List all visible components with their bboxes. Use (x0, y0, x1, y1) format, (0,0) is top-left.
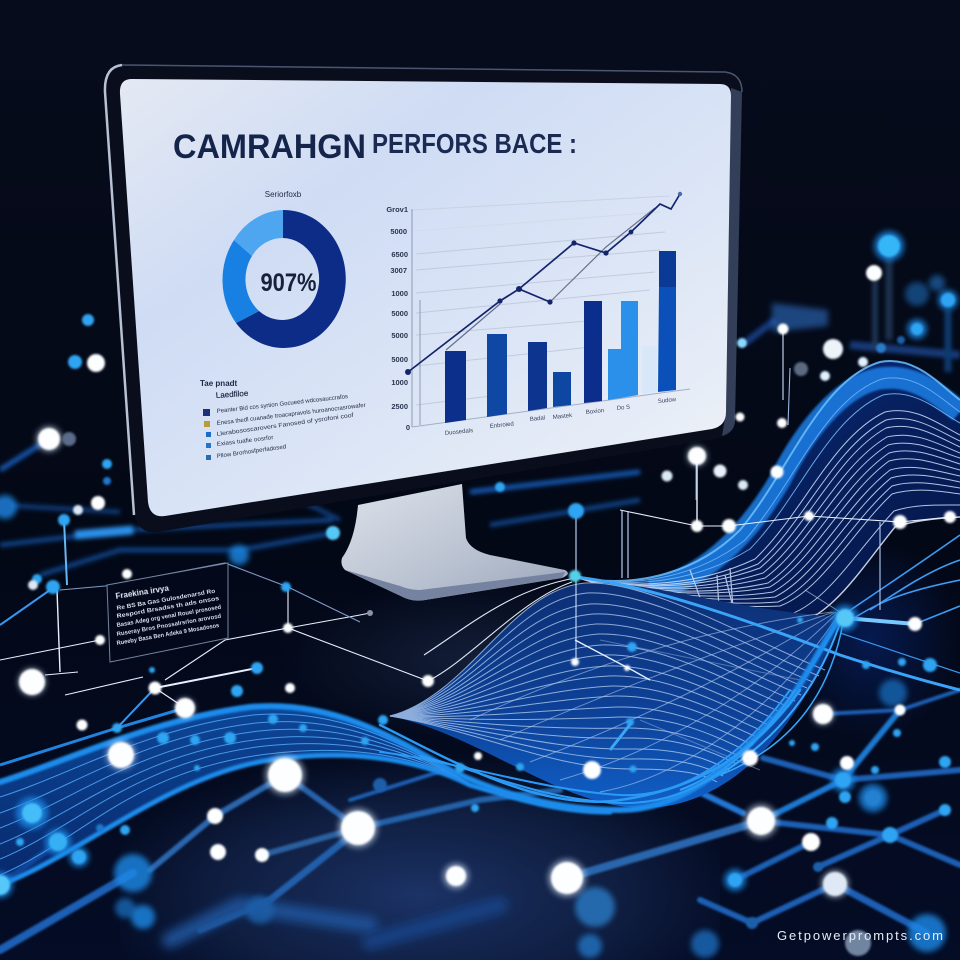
floating data card (107, 563, 228, 662)
blue glow nodes (0, 231, 958, 958)
monitor stand (341, 484, 568, 601)
chart category labels: Mastek (553, 413, 573, 421)
thick network connections (soft blue) (0, 690, 960, 950)
lower band inner lines (0, 714, 468, 875)
donut segment: mid blue (223, 240, 259, 323)
legend rows: Exiass tuafie oosrfor (217, 435, 274, 448)
dashboard title (173, 128, 577, 166)
chart y axis labels: Grov1 (386, 205, 408, 214)
chart category labels: Enbroied (490, 422, 514, 430)
card body text: Re BS Ba Gas Gulosdenarsd Ro (116, 589, 216, 612)
donut caption: Seriorfoxb (265, 190, 302, 199)
donut segment: navy (236, 210, 346, 348)
chart category labels (445, 397, 677, 437)
legend rows (216, 394, 366, 460)
hollow node marker (367, 610, 373, 616)
trend line primary (405, 192, 682, 375)
lower band bright edges (0, 617, 840, 885)
legend (200, 379, 366, 460)
donut segment: light blue (234, 210, 283, 256)
legend rows: Enesa thedl cuanade troacapravols huroanocrasrowafer (217, 403, 366, 427)
fan bright rising lines (610, 617, 844, 790)
chart y axis labels: 5000 (391, 309, 408, 318)
legend rows: Peanter Bid cos syrtion Gocueed wdcosauccrafos (217, 394, 348, 415)
card heading: Fraekina irvya (115, 584, 170, 601)
wave ridge lines (575, 361, 960, 640)
legend heading: Tae pnadt (200, 379, 238, 388)
legend heading (200, 379, 249, 400)
chart y axis labels: 1000 (391, 289, 408, 298)
dashboard title: CAMRAHGN (173, 128, 366, 166)
chart y axis labels: 5000 (390, 227, 407, 236)
right side curves (840, 535, 960, 624)
donut value: 907% (260, 269, 316, 297)
wave bright edge (650, 378, 960, 590)
chart y axis labels: 5000 (391, 331, 408, 340)
trend line secondary (446, 208, 655, 350)
card body text: Basas Adeg org venal Rouel prososed (116, 605, 222, 629)
chart y axis labels: 0 (406, 423, 410, 432)
legend rows: Pllow Brorhosfperfadosed (216, 444, 287, 460)
card body text (116, 589, 222, 647)
donut chart (223, 190, 346, 348)
loose white curves left of fan (424, 578, 575, 681)
bar and line chart (386, 192, 690, 437)
chart grid (412, 196, 690, 427)
chart category labels: Duosedals (445, 428, 473, 437)
chart y axis labels (386, 205, 410, 432)
chart bars (445, 251, 676, 423)
chart y axis labels: 6500 (391, 250, 408, 259)
chart category labels: Sudow (658, 397, 677, 405)
chart y axis labels: 2500 (391, 402, 408, 411)
left blue strand (0, 708, 185, 765)
legend heading: Laedfiloe (216, 389, 249, 400)
chart category labels: Boxion (586, 408, 604, 416)
watermark: Getpowerprompts.com (777, 928, 943, 943)
monitor screen (120, 79, 731, 516)
ridge crossing line (575, 577, 960, 690)
monitor frame (105, 65, 742, 532)
wave surface: saddle fan (390, 535, 960, 808)
legend swatches (203, 409, 211, 460)
wave surface: lower band (0, 617, 840, 885)
network connections: white (0, 330, 950, 708)
chart category labels: Do S (617, 405, 630, 412)
blurred background network (0, 250, 960, 575)
card body text: Rueeby Basa Ben Adeka 9 Mosadosos (116, 623, 220, 647)
chart y axis labels: 5000 (391, 355, 408, 364)
chart y axis labels: 3007 (390, 266, 407, 275)
network connections: bright blue (0, 456, 960, 728)
white glow nodes (18, 265, 956, 956)
wave surface: large ridge (575, 361, 960, 640)
fan lines across (470, 612, 840, 792)
dashboard title: PERFORS BACE : (372, 128, 577, 159)
chart y axis labels: 1000 (391, 378, 408, 387)
card body text: Ruseray Bros Pnossalrsrlon arovosd (116, 614, 222, 638)
card body text: Respord Brsadss th ads onsos (116, 596, 221, 620)
legend rows: Llerabososcarovers Fanosed of ysrofoni coof (216, 413, 354, 438)
fan lines along (390, 583, 825, 782)
chart category labels: Badal (530, 415, 545, 423)
